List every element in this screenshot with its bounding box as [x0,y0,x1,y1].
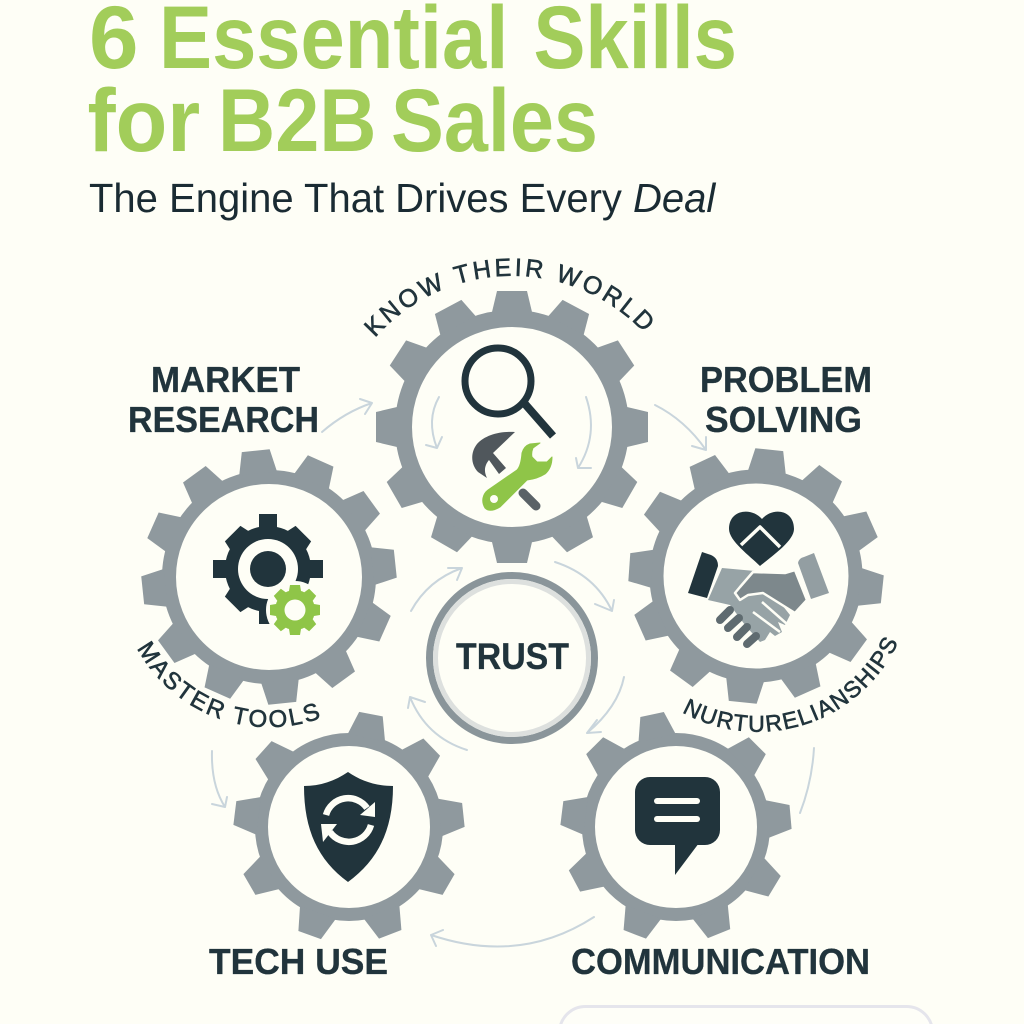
title: B2B [218,71,376,170]
label: problem solving: PROBLEM [700,359,872,400]
icon: heart and handshake [688,512,829,644]
subtitle: The Engine That Drives Every Deal [89,175,716,221]
label: problem solving: SOLVING [705,399,862,440]
arrow: master tools to tech use [212,751,227,807]
title: for [88,71,200,170]
trust hub [430,576,594,740]
label: market research: RESEARCH [128,399,319,440]
label: communication: COMMUNICATION [571,941,870,982]
gear: know their world [376,291,648,563]
icon: shield with sync arrows [304,772,393,882]
title: Sales [391,71,598,170]
arrow: communication to tech use [431,917,594,947]
arrow: trust loop bottom left [408,697,467,750]
arrow: top gear to problem solving [655,405,706,450]
icon: speech bubble [635,777,720,875]
panel: bottom callout [560,1006,932,1024]
icon: hammer [472,432,536,506]
label: market research [128,359,319,440]
arrow: trust loop top left [411,568,462,611]
curved label: nurture relationships: NURTURELIANSHIPS [683,637,896,732]
icon: wrench [483,443,552,510]
icon: tools gear [213,514,324,639]
arrow: inside top gear right [576,397,591,468]
gear: problem solving / relationships [628,448,884,704]
gear: market research / master tools [141,449,397,705]
gear: communication [560,711,792,941]
arrow: trust loop top right [555,562,614,611]
label: market research: MARKET [151,359,300,400]
curved label: know their world: KNOW THEIR WORLD [364,258,652,337]
label: problem solving [700,359,872,440]
title [88,0,737,170]
curved label: master tools: MASTER TOOLS [137,640,320,728]
arrow: relationships to communication [800,748,814,813]
arrow: research to top gear [322,399,372,432]
label: tech use: TECH USE [209,941,388,982]
arrow: inside top gear left [426,397,442,448]
gear: tech use [233,710,465,942]
trust hub: TRUST [456,636,569,677]
icon: magnifying glass [465,348,553,436]
arrow: trust loop right [587,677,624,733]
